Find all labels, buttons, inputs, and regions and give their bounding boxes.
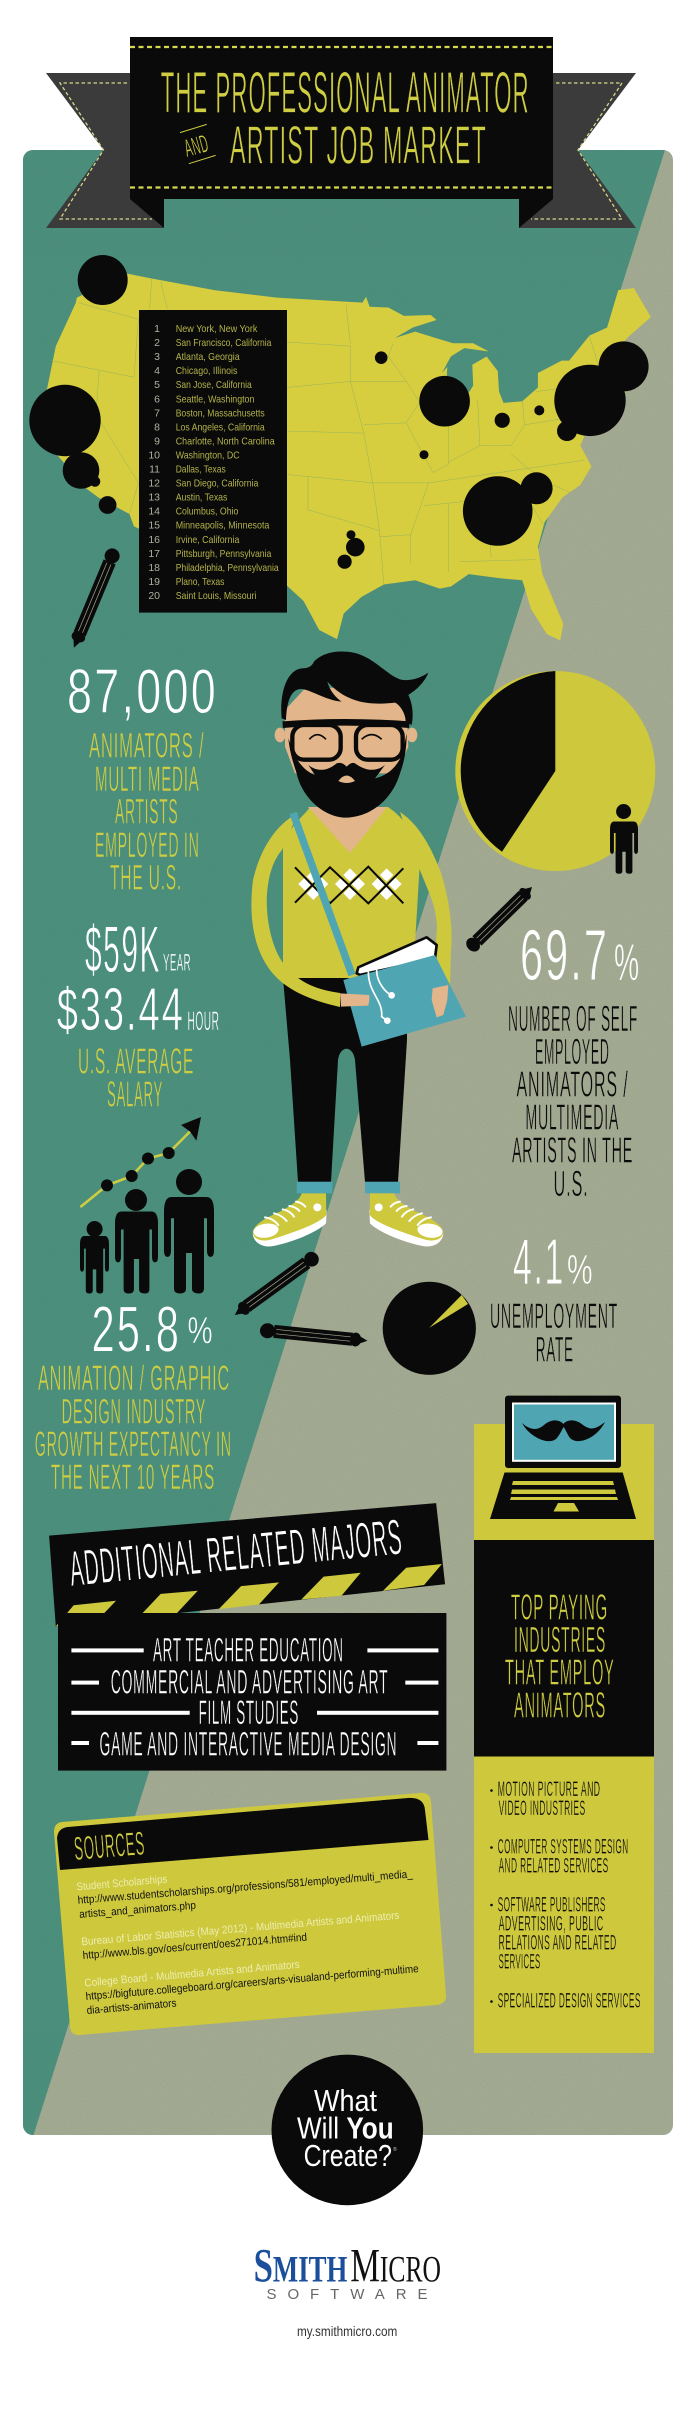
icon: laptop with moustache — [490, 1396, 636, 1519]
stat: 25.8% growth: % — [188, 1310, 214, 1352]
clapper stick — [49, 1503, 445, 1626]
ranked list of cities: Plano, Texas — [176, 576, 224, 588]
badge: what will you create: Will You — [297, 2111, 394, 2146]
ranked list of cities: Pittsburgh, Pennsylvania — [176, 548, 272, 560]
source citations: Student Scholarships — [76, 1873, 168, 1893]
ranked list of cities: San Jose, California — [176, 379, 252, 391]
background panel — [23, 150, 673, 2135]
ranked list of cities: Irvine, California — [176, 534, 240, 546]
text: THE NEXT 10 YEARS — [51, 1458, 215, 1497]
pencil by pie chart — [463, 882, 537, 954]
text: ANIMATION / GRAPHIC — [38, 1359, 230, 1398]
head with hair, glasses and beard — [275, 652, 428, 818]
badge: what will you create: What — [314, 2083, 377, 2118]
ranked list of cities: 1 — [154, 323, 160, 335]
source citations: dia-artists-animators — [86, 1997, 177, 2017]
map: contiguous United States — [47, 274, 651, 640]
growth chart: line, arrow and people — [80, 1117, 214, 1294]
ranked list of cities: 15 — [148, 520, 160, 532]
sweater — [251, 807, 452, 1007]
sweater argyle pattern — [295, 867, 403, 903]
majors list — [58, 1613, 446, 1771]
panel: sources — [54, 1793, 446, 2035]
text: GROWTH EXPECTANCY IN — [35, 1425, 232, 1464]
title banner — [46, 37, 636, 228]
ranked list of cities: 13 — [148, 492, 160, 504]
ranked list of cities: Philadelphia, Pennsylvania — [176, 562, 279, 574]
ranked list of cities: 11 — [149, 464, 160, 476]
badge: what will you create: Create? — [304, 2138, 392, 2173]
stat: 87,000 animators: THE U.S. — [110, 858, 182, 898]
ranked list of cities: 17 — [148, 548, 160, 560]
bag and sketchbook — [340, 937, 466, 1047]
source citations: Bureau of Labor Statistics (May 2012) - Multimedia Artists and Animators — [81, 1910, 400, 1948]
logo: Smith Micro Software: SMITH — [254, 2240, 347, 2292]
ranked list of cities: 12 — [148, 478, 160, 490]
pie chart: unemployment — [383, 1282, 476, 1375]
panel: top paying industries — [474, 1396, 654, 2053]
text: EMPLOYED IN — [95, 826, 200, 865]
logo: Smith Micro Software — [254, 2240, 441, 2303]
ranked list of cities: 8 — [154, 421, 160, 433]
neckline — [308, 807, 387, 853]
stat: 87,000 animators: ARTISTS — [115, 793, 178, 832]
ranked list of cities: Saint Louis, Missouri — [176, 590, 256, 602]
source citations: College Board - Multimedia Artists and Animators — [84, 1959, 301, 1990]
logo: Smith Micro Software: MICRO — [350, 2240, 441, 2292]
pie chart: self employed share — [455, 671, 655, 874]
ranked list of cities: Seattle, Washington — [176, 393, 255, 405]
ranked list of cities: New York, New York — [176, 323, 258, 335]
ranked list of cities: 4 — [154, 365, 160, 377]
trouser cuffs — [297, 1182, 400, 1193]
ranked list of cities: Chicago, Illinois — [176, 365, 237, 377]
bag strap — [293, 813, 352, 975]
majors list: ART TEACHER EDUCATION — [153, 1632, 344, 1670]
ranked list of cities: Dallas, Texas — [176, 464, 226, 476]
industries list — [490, 1778, 641, 2013]
stat: 87,000 animators — [67, 657, 218, 898]
sneakers — [252, 1193, 443, 1246]
map bubbles: city job counts — [29, 255, 649, 569]
ranked list of cities: Austin, Texas — [176, 492, 227, 504]
pencil by map — [67, 546, 122, 651]
ranked list of cities: 2 — [154, 337, 160, 349]
stat: average salary: U.S. AVERAGE — [78, 1040, 194, 1082]
text: HOUR — [188, 1006, 220, 1036]
ranked list of cities: San Diego, California — [176, 478, 259, 490]
ranked list of cities: Atlanta, Georgia — [176, 351, 240, 363]
stat: average salary: $59K — [85, 912, 161, 986]
stat: average salary — [57, 912, 220, 1115]
ranked list of cities: Los Angeles, California — [176, 421, 265, 433]
panel: sources: SOURCES — [73, 1824, 146, 1867]
ranked list of cities — [139, 310, 287, 613]
stat: 69.7% self employed — [508, 916, 641, 1204]
website url: my.smithmicro.com — [297, 2324, 397, 2339]
ranked list of cities: Boston, Massachusetts — [176, 407, 265, 419]
majors list: FILM STUDIES — [199, 1694, 299, 1732]
stat: 87,000 animators: ANIMATORS / — [89, 727, 204, 766]
source citations: http://www.bls.gov/oes/current/oes271014.htm#ind — [82, 1932, 307, 1962]
stat: 87,000 animators: 87,000 — [67, 657, 218, 727]
ranked list of cities: 9 — [154, 435, 160, 447]
source citations: artists_and_animators.php — [79, 1900, 196, 1921]
stat: average salary: YEAR — [163, 950, 191, 977]
character: bearded animator with glasses — [251, 652, 466, 1246]
source citations: http://www.studentscholarships.org/professions/581/employed/multi_media_ — [77, 1868, 414, 1907]
ranked list of cities: 20 — [148, 590, 160, 602]
stat: 4.1% unemployment: RATE — [536, 1330, 574, 1370]
ranked list of cities: 10 — [148, 450, 160, 462]
stat: average salary: SALARY — [107, 1074, 163, 1115]
ranked list of cities: Charlotte, North Carolina — [176, 435, 275, 447]
stat: 4.1% unemployment: % — [567, 1246, 594, 1293]
legs and trousers — [283, 978, 407, 1182]
title banner: AND — [181, 130, 212, 163]
pencils by unemployment pie — [230, 1249, 368, 1348]
source citations: https://bigfuture.collegeboard.org/careers/arts-visualand-performing-multime — [85, 1963, 419, 2003]
source citations — [76, 1868, 419, 2017]
industries list: SERVICES — [499, 1951, 541, 1974]
ranked list of cities: 19 — [148, 576, 160, 588]
text: DESIGN INDUSTRY — [62, 1392, 206, 1432]
stat: 25.8% growth: 25.8 — [92, 1293, 181, 1366]
heading: top paying industries — [505, 1586, 614, 1725]
badge: what will you create: ® — [393, 2146, 397, 2153]
stat: 25.8% growth — [35, 1293, 232, 1497]
stat: 69.7% self employed: % — [614, 934, 641, 992]
stat: 4.1% unemployment — [490, 1225, 618, 1370]
ranked list of cities: Columbus, Ohio — [176, 506, 239, 518]
ranked list of cities: 16 — [148, 534, 160, 546]
stat: 69.7% self employed: U.S. — [554, 1163, 588, 1204]
clapperboard: additional related majors — [49, 1503, 446, 1771]
ranked list of cities: 6 — [154, 393, 160, 405]
stat: average salary: $33.44 — [57, 976, 185, 1043]
badge: what will you create — [272, 2055, 423, 2205]
ranked list of cities: San Francisco, California — [176, 337, 272, 349]
ranked list of cities: Washington, DC — [176, 450, 240, 462]
stat: 69.7% self employed: 69.7 — [520, 916, 609, 996]
ranked list of cities: 18 — [148, 562, 160, 574]
stat: 4.1% unemployment: 4.1 — [513, 1225, 565, 1298]
ranked list of cities: 7 — [154, 407, 160, 419]
ranked list of cities: 14 — [148, 506, 160, 518]
ranked list of cities: 3 — [154, 351, 160, 363]
stat: 87,000 animators: MULTI MEDIA — [95, 760, 200, 799]
ranked list of cities: Minneapolis, Minnesota — [176, 520, 270, 532]
ranked list of cities: 5 — [154, 379, 160, 391]
logo: Smith Micro Software: SOFTWARE — [266, 2286, 428, 2303]
